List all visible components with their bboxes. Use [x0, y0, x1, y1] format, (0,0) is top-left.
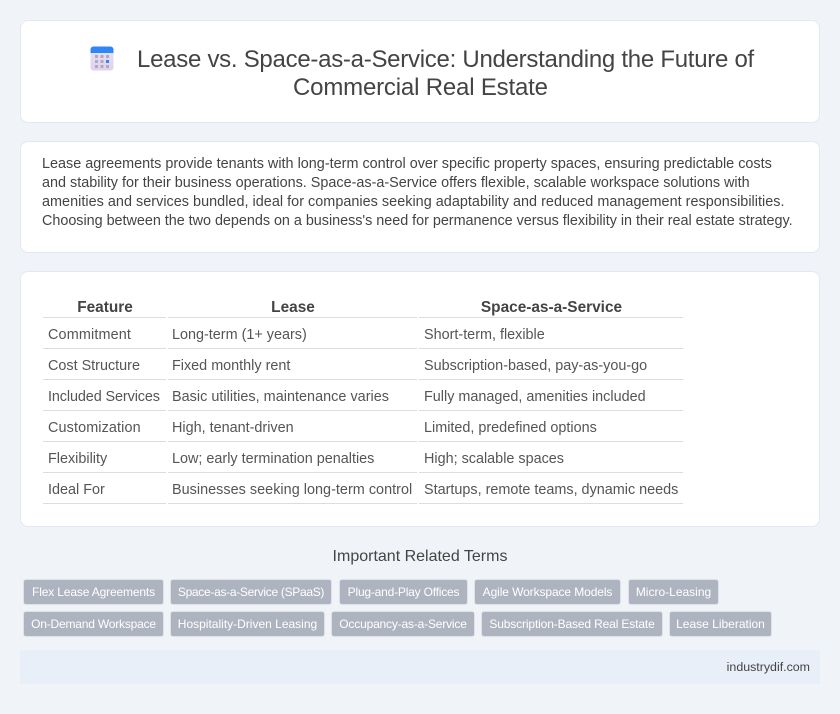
tags: related terms: Space-as-a-Service (SPaaS) — [178, 585, 324, 599]
tags: related terms: Hospitality-Driven Leasing — [178, 617, 317, 631]
table header: feature: Feature — [77, 299, 133, 316]
tags: related terms: Subscription-Based Real Estate — [489, 617, 655, 631]
tags: related terms: Plug-and-Play Offices — [348, 585, 459, 599]
row: flexibility: Flexibility — [48, 451, 107, 467]
tags: related terms: Flex Lease Agreements — [32, 585, 155, 599]
panel: comparison table: Startups, remote teams, dynamic needs — [424, 482, 678, 498]
text: description — [42, 156, 793, 229]
panel: comparison table: High, tenant-driven — [172, 420, 294, 436]
panel: comparison table: Low; early termination penalties — [172, 451, 374, 467]
panel: comparison table: Long-term (1+ years) — [172, 327, 307, 343]
panel: comparison table: Limited, predefined options — [424, 420, 597, 436]
panel: comparison table — [20, 271, 820, 527]
row: commitment: Commitment — [48, 327, 131, 343]
tags: related terms: Agile Workspace Models — [483, 585, 612, 599]
icon: calendar — [90, 46, 114, 70]
title — [137, 46, 754, 101]
text: description: Choosing between the two depends on a business's need for permanence versus flexibility in their real estate strategy. — [42, 213, 793, 229]
heading: related terms: Important Related Terms — [333, 548, 507, 565]
tags: related terms: Lease Liberation — [676, 617, 765, 631]
row: included services: Included Services — [48, 389, 160, 405]
panel: comparison table: Fixed monthly rent — [172, 358, 290, 374]
table header: space-as-a-service: Space-as-a-Service — [481, 299, 622, 316]
footer bar — [20, 650, 820, 684]
tags: related terms: Occupancy-as-a-Service — [339, 617, 467, 631]
panel: comparison table: Businesses seeking long-term control — [172, 482, 412, 498]
panel: description — [20, 141, 820, 253]
panel: comparison table: Basic utilities, maintenance varies — [172, 389, 389, 405]
text: description: and stability for their business operations. Space-as-a-Service offers flexible, scalable workspace solutions with — [42, 175, 750, 191]
panel: comparison table: Fully managed, amenities included — [424, 389, 646, 405]
tags: related terms — [23, 579, 772, 637]
panel: header — [20, 20, 820, 123]
title: Commercial Real Estate — [293, 74, 548, 101]
panel: comparison table: Subscription-based, pay-as-you-go — [424, 358, 647, 374]
row: customization: Customization — [48, 420, 141, 436]
footer: source: industrydif.com — [727, 660, 810, 674]
panel: comparison table: Short-term, flexible — [424, 327, 545, 343]
row: ideal for: Ideal For — [48, 482, 105, 498]
tags: related terms: Micro-Leasing — [636, 585, 711, 599]
row: cost structure: Cost Structure — [48, 358, 140, 374]
table header: lease: Lease — [271, 299, 315, 316]
tags: related terms: On-Demand Workspace — [31, 617, 156, 631]
text: description: Lease agreements provide tenants with long-term control over specific property spaces, ensuring predictable costs — [42, 156, 772, 172]
text: description: amenities and services bundled, ideal for companies seeking adaptability and reduced management responsibilities. — [42, 194, 785, 210]
title: Lease vs. Space-as-a-Service: Understanding the Future of — [137, 46, 754, 73]
panel: comparison table: High; scalable spaces — [424, 451, 564, 467]
